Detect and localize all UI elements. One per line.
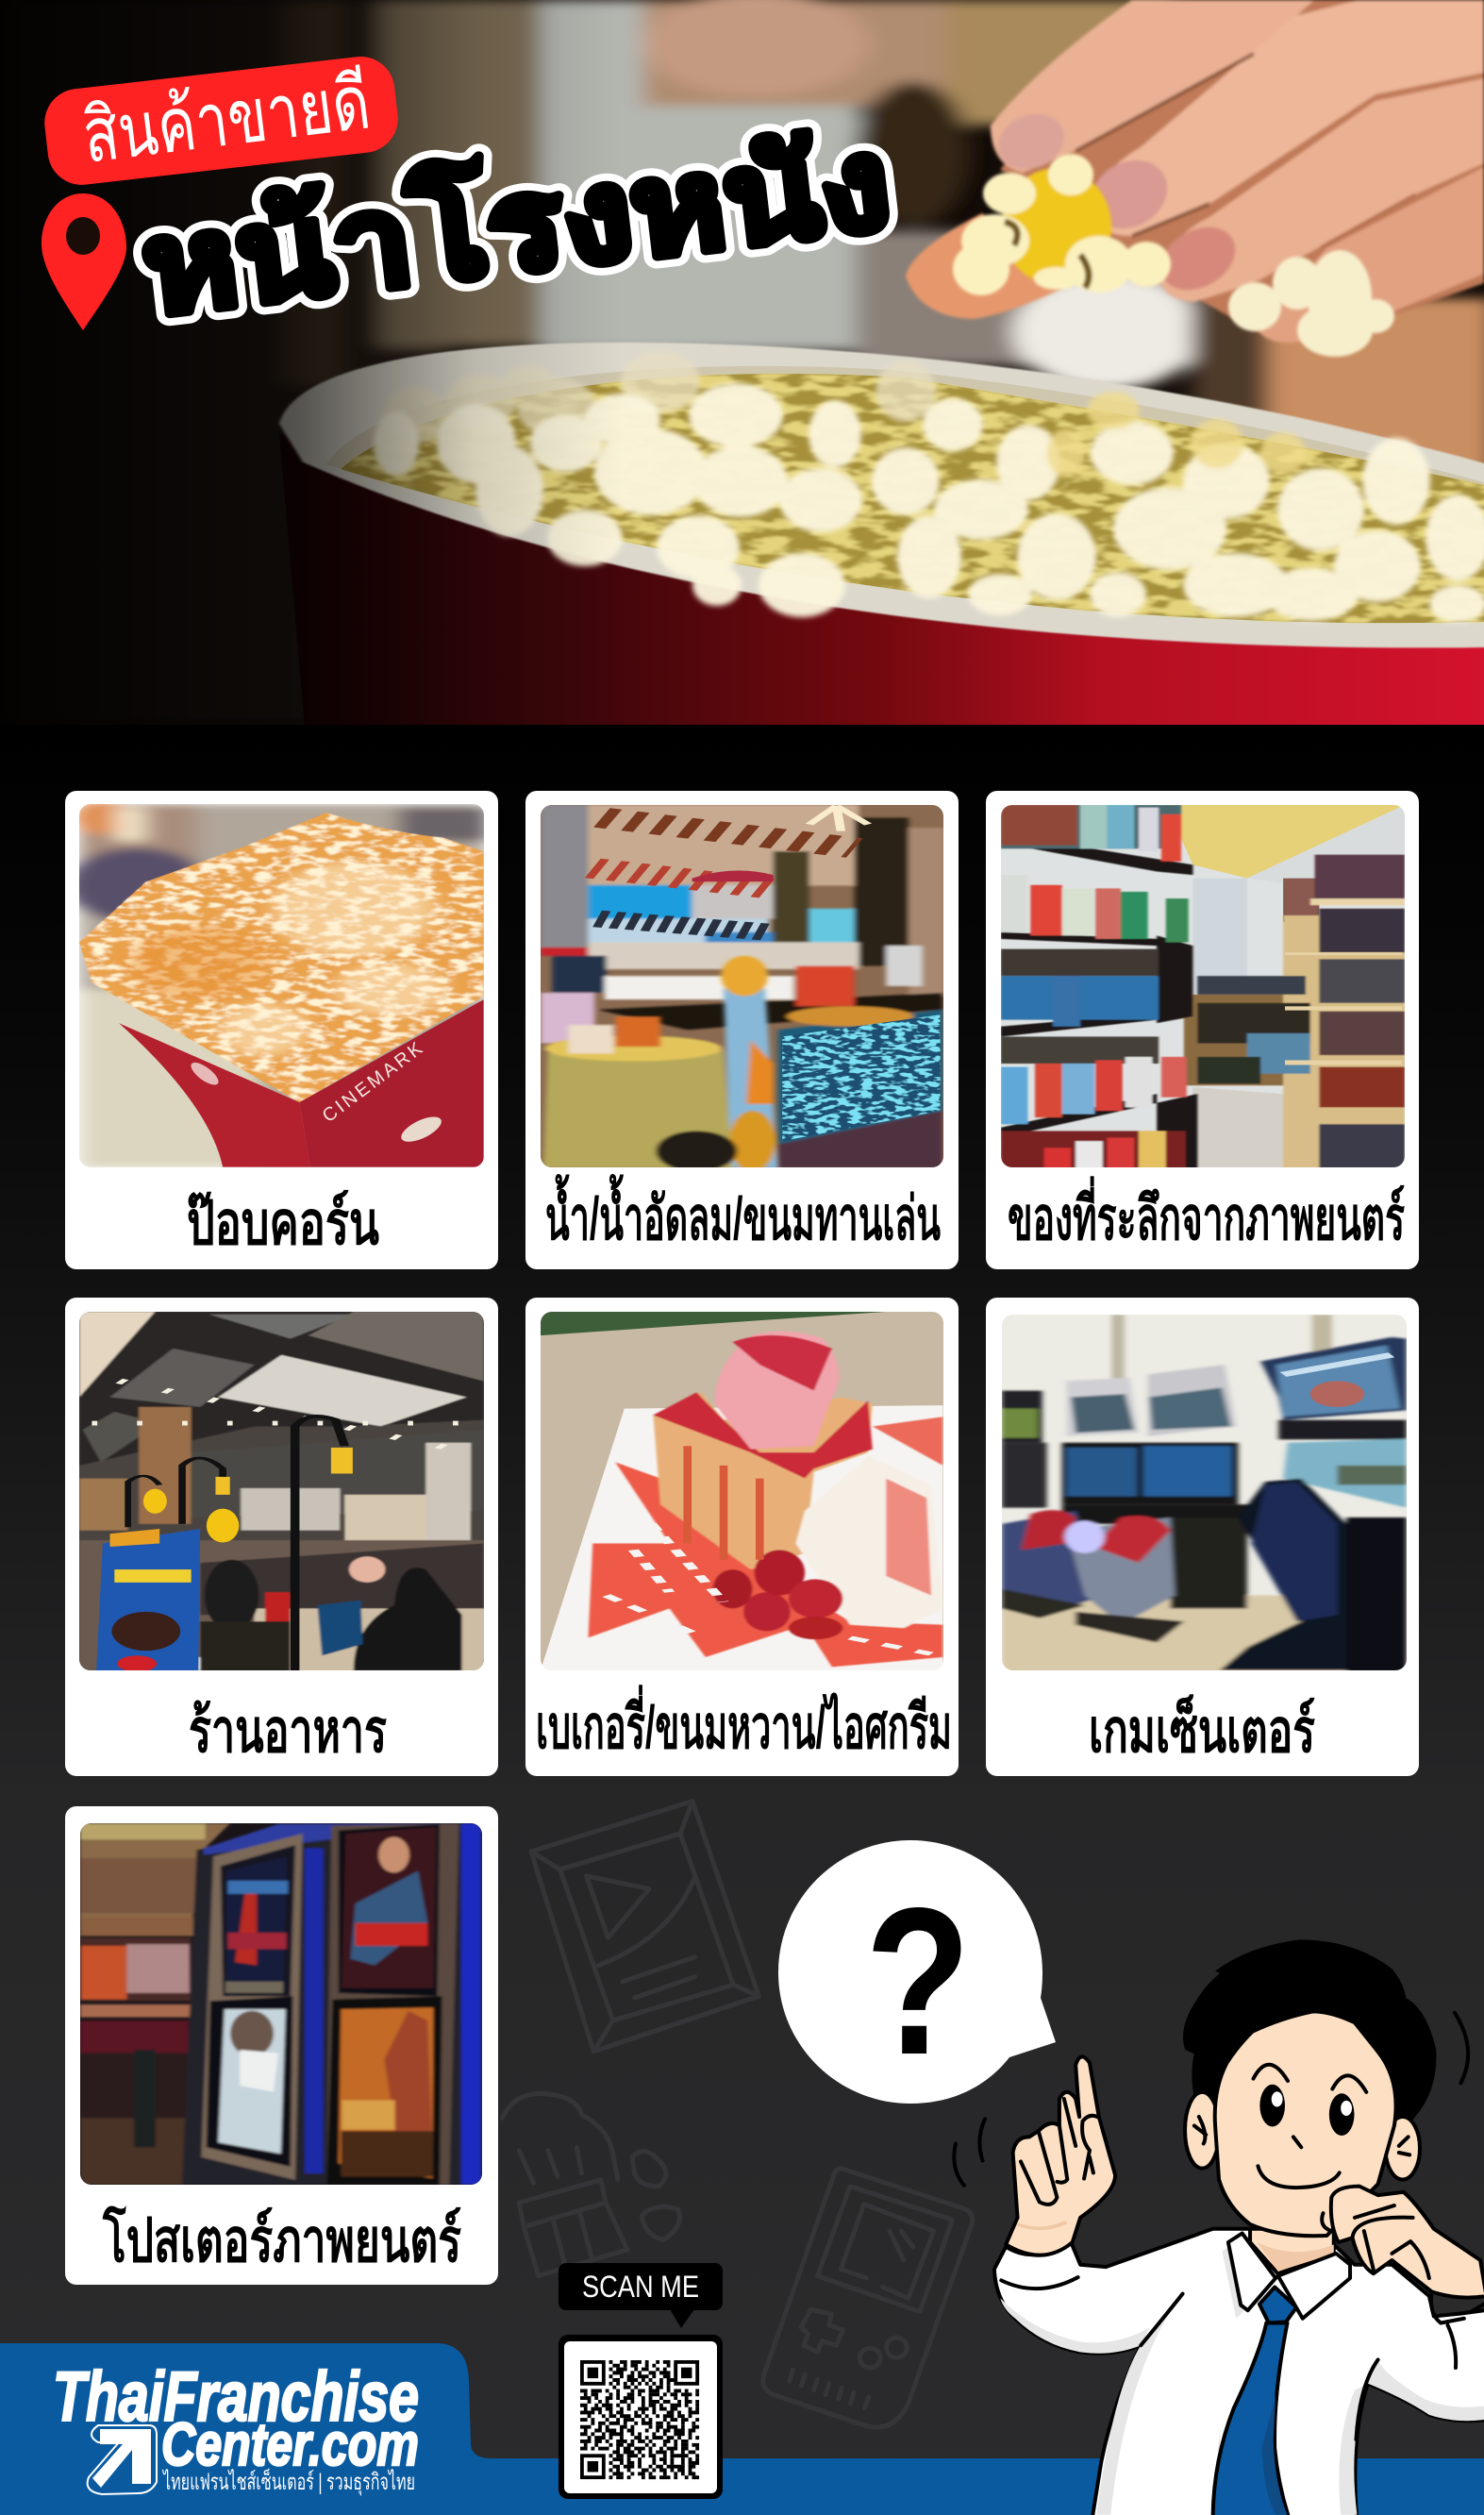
label: น้ำ/น้ำอัดลม/ขนมทานเล่น	[545, 1174, 941, 1252]
panel: movie posters	[65, 1806, 498, 2285]
panel: popcorn	[65, 791, 498, 1269]
shirt fold lines	[1001, 2277, 1484, 2440]
photo: popcorn	[65, 801, 489, 1168]
label: เบเกอรี่/ขนมหวาน/ไอศกรีม	[536, 1685, 952, 1761]
speech bubble with question mark	[778, 1840, 1056, 2104]
label: โปสเตอร์ภาพยนตร์	[102, 2205, 461, 2274]
hair back	[1183, 1939, 1436, 2139]
scan me tag	[559, 2263, 723, 2328]
subtitle: สินค้าขายดี	[78, 59, 375, 178]
decorative icon: handheld game console	[763, 2169, 973, 2427]
photo: snack bar	[541, 804, 946, 1171]
page background	[0, 725, 1484, 2515]
footer blue band	[0, 2343, 1484, 2515]
tie	[1213, 2288, 1296, 2515]
photo: souvenir shop	[1001, 804, 1407, 1168]
hand pointing up	[1006, 2056, 1115, 2255]
motion lines	[954, 2013, 1468, 2186]
eyebrows, nose, smile	[1253, 2065, 1366, 2188]
photo: food court	[79, 1312, 489, 1673]
right shirt cuff	[1431, 2294, 1464, 2323]
title group	[41, 53, 897, 341]
face	[1215, 2011, 1396, 2236]
popcorn kernels in bucket	[374, 352, 1484, 623]
photo: arcade	[1002, 1315, 1407, 1672]
logo: ThaiFranchiseCenter.com: Center.com	[161, 2410, 419, 2478]
neck	[1250, 2229, 1334, 2273]
shirt	[994, 2229, 1484, 2515]
logo: ThaiFranchiseCenter.com	[53, 2357, 419, 2496]
hand	[906, 0, 1484, 343]
panel: restaurants	[65, 1298, 498, 1776]
right ear	[1386, 2117, 1420, 2180]
icon: location pin	[42, 193, 126, 330]
eyes	[1259, 2085, 1354, 2136]
character: businessman pointing up	[954, 1939, 1484, 2515]
label: ร้านอาหาร	[189, 1697, 387, 1765]
panel: drinks and snacks	[525, 791, 959, 1269]
logo wordmark: ThaiFranchise	[53, 2357, 419, 2436]
QR code	[559, 2335, 723, 2499]
heading: หน้าโรงหนัง	[135, 109, 897, 341]
decorative icon: popcorn box	[502, 2093, 679, 2275]
popcorn in hand	[953, 154, 1394, 357]
photo: cinema posters	[80, 1823, 484, 2186]
panel: bakery and desserts	[525, 1298, 959, 1776]
panel: movie souvenirs	[986, 791, 1419, 1269]
photo: popcorn: CINEMARK	[319, 1036, 428, 1127]
hand on chin	[1322, 2187, 1484, 2298]
label: ป๊อบคอร์น	[187, 1189, 379, 1257]
red pill	[41, 53, 402, 189]
label: เกมเซ็นเตอร์	[1089, 1695, 1315, 1765]
panel: game center	[986, 1298, 1419, 1776]
photo: dessert	[541, 1312, 946, 1672]
collar	[1228, 2233, 1350, 2319]
question mark: ?	[865, 1865, 971, 2099]
logo tagline: ไทยแฟรนไชส์เซ็นเตอร์ | รวมธุรกิจไทย	[162, 2468, 415, 2496]
decorative icon: film poster	[531, 1802, 759, 2052]
bucket	[279, 343, 1484, 727]
heading: หน้าโรงหนัง	[135, 109, 897, 341]
hero photo: popcorn bucket and hand	[0, 0, 1484, 727]
left ear	[1185, 2092, 1220, 2169]
icon: up-right arrow	[88, 2425, 157, 2494]
scan me tag: SCAN ME	[582, 2270, 699, 2304]
shirt shading	[1000, 2247, 1484, 2515]
